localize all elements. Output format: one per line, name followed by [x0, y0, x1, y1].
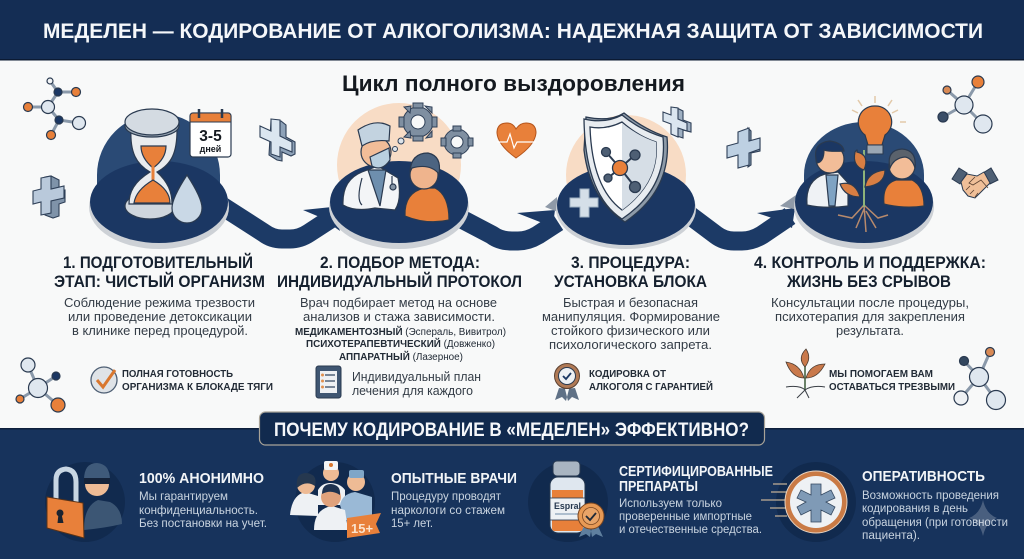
feature: anonymity text — [139, 470, 267, 530]
shield — [584, 113, 667, 222]
step 3 text: УСТАНОВКА БЛОКА — [554, 272, 707, 291]
feature: doctors text: 15+ лет. — [391, 518, 433, 530]
feature: doctors text: наркологи со стажем — [391, 505, 505, 517]
step 3 text: стойкого физического или — [551, 323, 710, 338]
feature: certified text: Используем только — [619, 498, 722, 510]
feature: anonymity text: конфиденциальность. — [139, 505, 258, 517]
callout: sober support: МЫ ПОМОГАЕМ ВАМ — [829, 369, 933, 380]
feature: doctors text: Процедуру проводят — [391, 491, 502, 503]
feature: certified text: СЕРТИФИЦИРОВАННЫЕ — [619, 463, 773, 480]
feature: certified text — [619, 463, 773, 536]
doctor — [343, 123, 399, 210]
step 3 text: 3. ПРОЦЕДУРА: — [571, 253, 690, 272]
step 4 text: 4. КОНТРОЛЬ И ПОДДЕРЖКА: — [754, 253, 986, 272]
feature: promptness text: пациента). — [862, 530, 920, 542]
doctor — [807, 141, 848, 207]
callout: readiness: ПОЛНАЯ ГОТОВНОСТЬ — [122, 369, 233, 380]
connector arrow 1 — [222, 206, 340, 239]
icon: cross upper right of shield — [663, 107, 691, 138]
step 1 illustration — [89, 109, 229, 249]
feature: anonymity text: Мы гарантируем — [139, 491, 228, 503]
header band — [0, 0, 1024, 60]
icon: doctors team 15+: 15+ — [351, 521, 373, 536]
connector arrow 3 — [688, 195, 798, 241]
icon: cross near step 4 — [727, 128, 760, 168]
feature: doctors text: ОПЫТНЫЕ ВРАЧИ — [391, 470, 517, 487]
heading pill: ПОЧЕМУ КОДИРОВАНИЕ В «МЕДЕЛЕН» ЭФФЕКТИВНО? — [274, 420, 749, 441]
step 4 text: результата. — [836, 323, 904, 338]
feature: anonymity text: 100% АНОНИМНО — [139, 470, 264, 487]
step 2 text: 2. ПОДБОР МЕТОДА: — [320, 253, 480, 272]
feature: certified text: проверенные импортные — [619, 511, 752, 523]
step 4 text: Консультации после процедуры, — [771, 295, 969, 310]
panel: why effective — [0, 412, 1024, 559]
feature: anonymity text: Без постановки на учет. — [139, 518, 267, 530]
step 1 text: Соблюдение режима трезвости — [64, 295, 255, 310]
icon: molecule bottom left — [16, 358, 65, 412]
step 3 text — [542, 253, 720, 352]
icon: molecule bottom right — [954, 348, 1006, 410]
callout: guarantee — [554, 364, 713, 401]
step 2 text — [277, 253, 522, 363]
icon: calendar 3-5 days: 3-5 — [199, 128, 222, 145]
water drop — [172, 175, 202, 223]
icon: calendar 3-5 days — [190, 109, 231, 157]
step 4 text: ЖИЗНЬ БЕЗ СРЫВОВ — [786, 272, 951, 291]
subtitle: cycle heading: Цикл полного выздоровления — [342, 71, 685, 96]
callout: readiness — [91, 367, 273, 393]
step 3 text: Быстрая и безопасная — [563, 295, 698, 310]
step 2 text: ПСИХОТЕРАПЕВТИЧЕСКИЙ (Довженко) — [306, 337, 495, 350]
callout: individual plan: лечения для каждого — [352, 383, 473, 398]
step 2 text: Врач подбирает метод на основе — [300, 295, 497, 310]
feature: doctors text — [391, 470, 517, 530]
icon: medical cross left — [33, 176, 65, 218]
patient — [405, 153, 449, 222]
icon: medical cross upper — [260, 119, 295, 161]
step 2 text: анализов и стажа зависимости. — [303, 309, 495, 324]
icon: calendar 3-5 days: дней — [200, 144, 221, 154]
title: МЕДЕЛЕН — КОДИРОВАНИЕ ОТ АЛКОГОЛИЗМА: НАДЕЖНАЯ ЗАЩИТА ОТ ЗАВИСИМОСТИ — [43, 20, 983, 43]
icon: lock and anonymous figure — [45, 462, 125, 542]
callout: readiness: ОРГАНИЗМА К БЛОКАДЕ ТЯГИ — [122, 382, 273, 393]
icon: doctors team 15+ — [290, 461, 381, 542]
heading pill — [260, 412, 764, 445]
icon: molecule top right — [938, 76, 992, 133]
icon: Espral bottle: Espral — [554, 501, 581, 511]
gears — [399, 103, 473, 158]
step 2 text: ИНДИВИДУАЛЬНЫЙ ПРОТОКОЛ — [277, 272, 522, 291]
step 3 text: манипуляция. Формирование — [542, 309, 720, 324]
icon: handshake — [952, 168, 998, 198]
feature: promptness text: кодирования в день — [862, 503, 968, 515]
callout: sober support: ОСТАВАТЬСЯ ТРЕЗВЫМИ — [829, 382, 955, 393]
step 2 text: АППАРАТНЫЙ (Лазерное) — [339, 350, 463, 363]
step 4 text: психотерапия для закрепления — [775, 309, 965, 324]
step 1 text — [54, 253, 265, 338]
step 3 illustration — [556, 113, 696, 249]
step 2 illustration — [329, 103, 473, 249]
icon: clock with star of life — [761, 462, 856, 542]
light bulb — [852, 96, 906, 154]
decorative sparkle — [969, 500, 997, 536]
callout: sober support — [786, 349, 955, 398]
icon: heart pulse — [497, 123, 536, 158]
callout: individual plan — [316, 366, 481, 398]
callout: individual plan: Индивидуальный план — [352, 369, 481, 384]
step 4 text — [754, 253, 986, 338]
icon: Espral bottle — [528, 461, 608, 542]
feature: promptness text: ОПЕРАТИВНОСТЬ — [862, 468, 985, 485]
icon: molecule top left — [24, 78, 86, 140]
hourglass — [125, 109, 179, 219]
feature: promptness text: обращения (при готовности — [862, 517, 1008, 529]
sprout — [840, 150, 885, 207]
small cross on disk — [570, 189, 598, 217]
feature: certified text: и отечественные средства. — [619, 524, 762, 536]
step 1 text: в клинике перед процедурой. — [72, 323, 248, 338]
callout: guarantee: АЛКОГОЛЯ С ГАРАНТИЕЙ — [589, 380, 713, 393]
feature: promptness text: Возможность проведения — [862, 490, 999, 502]
step 1 text: ЭТАП: ЧИСТЫЙ ОРГАНИЗМ — [54, 272, 265, 291]
step 4 illustration — [794, 96, 934, 249]
sprout roots — [838, 205, 888, 232]
callout: guarantee: КОДИРОВКА ОТ — [589, 369, 666, 380]
connector arrow 2 — [452, 197, 558, 241]
step 1 text: 1. ПОДГОТОВИТЕЛЬНЫЙ — [63, 253, 253, 272]
step 2 text: МЕДИКАМЕНТОЗНЫЙ (Эспераль, Вивитрол) — [295, 325, 506, 338]
patient — [884, 149, 924, 207]
feature: certified text: ПРЕПАРАТЫ — [619, 478, 698, 495]
step 1 text: или проведение детоксикации — [68, 309, 252, 324]
feature: promptness text — [862, 468, 1008, 542]
step 3 text: психологического запрета. — [549, 337, 712, 352]
